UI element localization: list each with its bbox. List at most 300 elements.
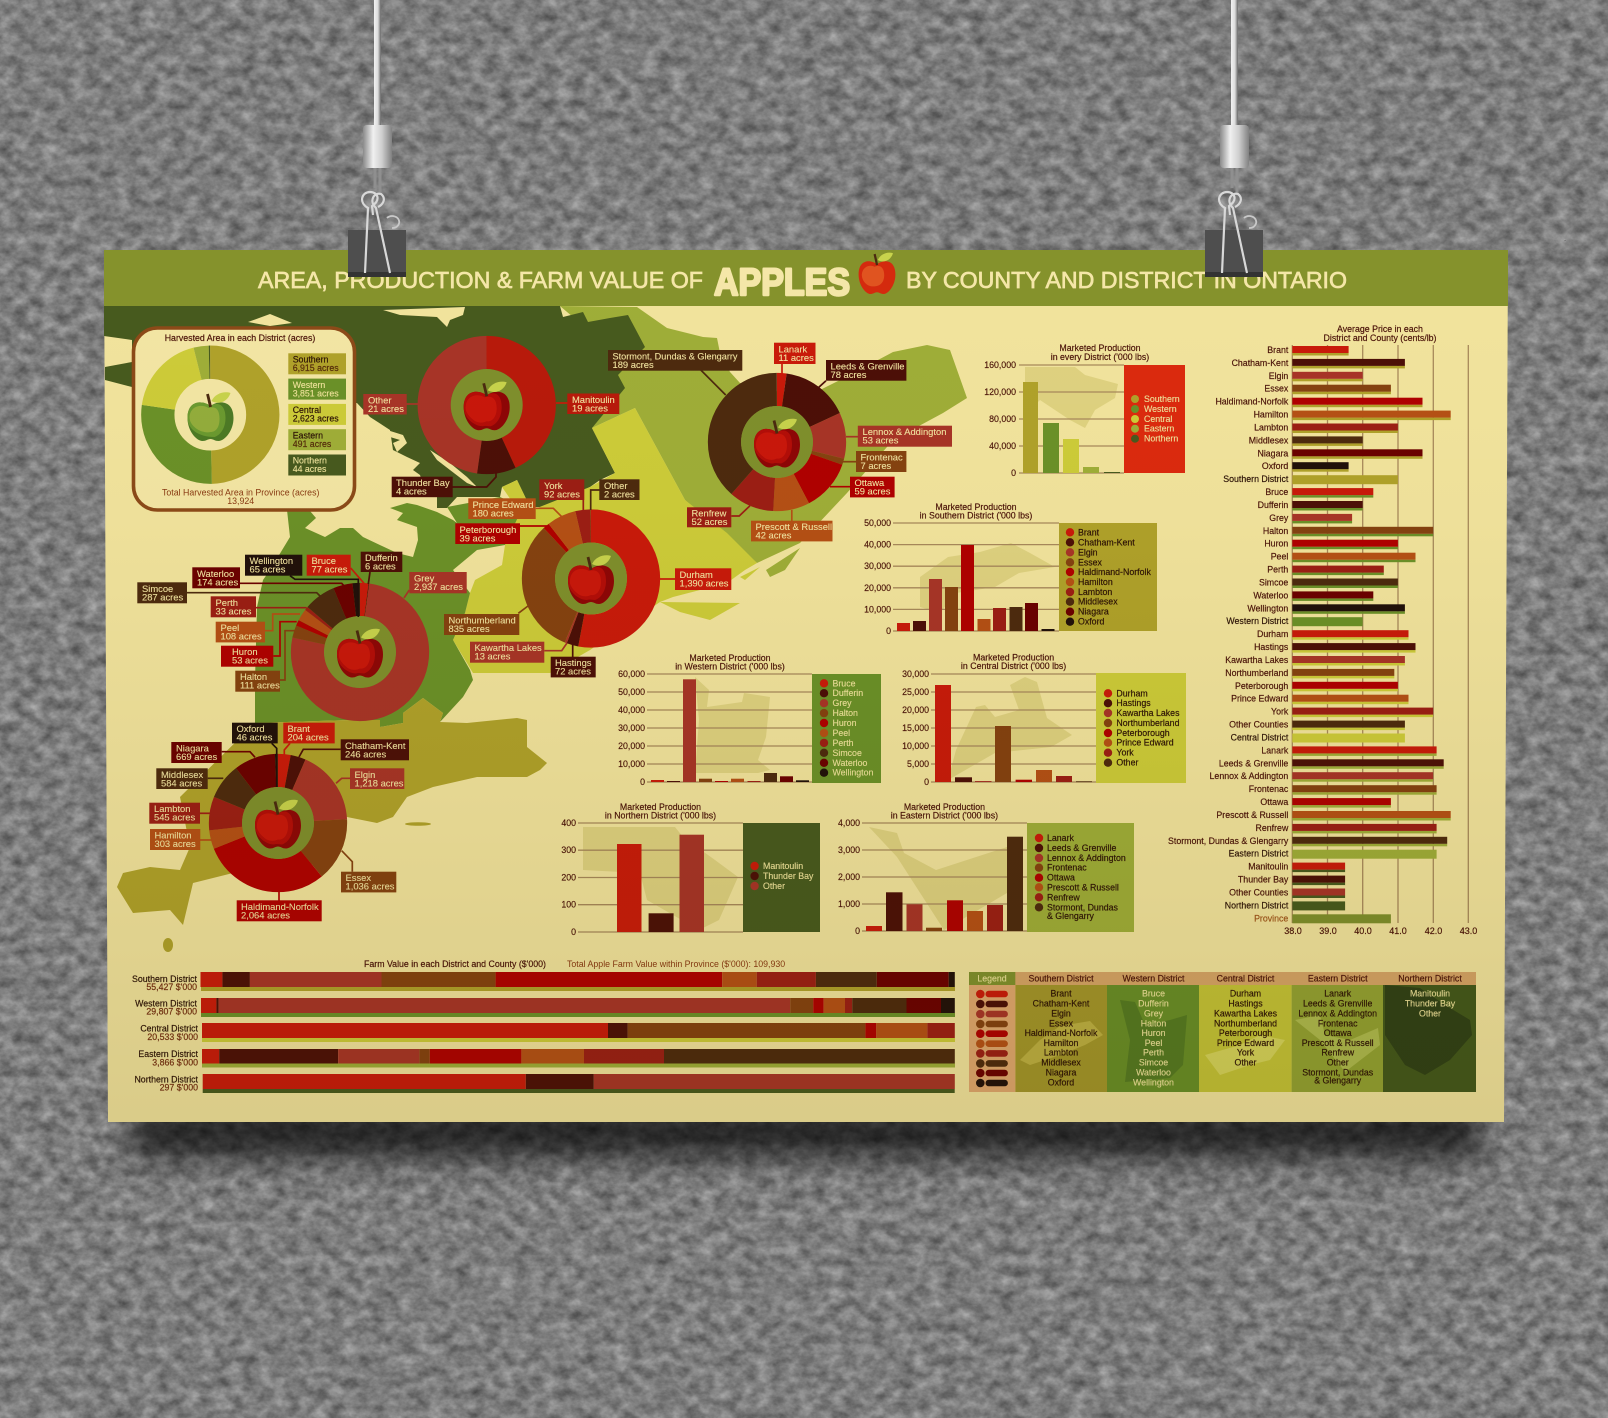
chart title: Marketed Production [904, 802, 985, 812]
legend table [969, 972, 1476, 1092]
callout: Northumberland: 835 acres [448, 623, 490, 634]
price rows: southern district: Haldimand-Norfolk [1215, 397, 1289, 407]
bar chart: western district: Dufferin [832, 688, 863, 698]
bar chart: northern district: 300 [561, 845, 576, 855]
price rows: eastern district: Leeds & Grenville [1219, 758, 1288, 768]
column: eastern district: Ottawa [1324, 1028, 1352, 1038]
bar chart: central district: Durham [1116, 688, 1148, 698]
column: southern district: Chatham-Kent [1033, 998, 1090, 1008]
row: northern district: 297 $'000 [160, 1083, 198, 1093]
bar chart: northern district: 100 [561, 900, 576, 910]
price rows: central district: Durham [1257, 629, 1288, 639]
bar chart: northern district: 200 [561, 872, 576, 882]
column: central district: Durham [1230, 988, 1261, 998]
price rows: eastern district: Frontenac [1249, 784, 1289, 794]
legend: western: 3,851 acres [293, 388, 339, 398]
bar chart: western district: 40,000 [618, 705, 645, 715]
bar chart: every district: 40,000 [989, 441, 1016, 451]
column: western district: Dufferin [1138, 998, 1169, 1008]
price rows: northern district [1225, 862, 1345, 910]
callout: Other 2 acres [591, 479, 640, 510]
callout: Grey: 2,937 acres [414, 581, 463, 592]
bar chart: southern district: Lambton [1078, 587, 1112, 597]
legend column: Legend [977, 974, 1007, 984]
price rows: eastern district: Lanark [1261, 745, 1289, 755]
column: western district: Huron [1142, 1028, 1166, 1038]
bar chart: southern district: 10,000 [864, 604, 891, 614]
column: western district: Grey [1144, 1008, 1164, 1018]
callout: Leeds & Grenville [818, 360, 906, 388]
callout: Simcoe [137, 582, 320, 603]
callout: Chatham-Kent [299, 739, 409, 760]
pie: northern district [434, 352, 539, 458]
column: southern district: Middlesex [1041, 1058, 1081, 1068]
callout: Hamilton: Hamilton [154, 830, 192, 840]
row: western district: 29,807 $'000 [146, 1007, 197, 1017]
bar chart: eastern district: Renfrew [1047, 892, 1080, 902]
callout: Durham [659, 568, 731, 590]
price rows: central district: Prince Edward [1231, 694, 1288, 704]
row: central district: 20,533 $'000 [147, 1032, 198, 1042]
map: small islands south [163, 822, 431, 952]
price rows: southern district [1215, 345, 1451, 484]
bar chart: every district: 0 [1011, 468, 1016, 478]
callout: York: York [544, 480, 563, 491]
callout: Niagara: Niagara [176, 742, 210, 754]
callout: Renfrew: 52 acres [692, 516, 728, 527]
bar chart: eastern district: & Glengarry [1047, 911, 1095, 921]
title: APPLES: APPLES [714, 262, 850, 304]
price rows: central district: Peterborough [1235, 681, 1288, 691]
legend: central [288, 404, 346, 425]
bar chart: central district: 0 [924, 777, 929, 787]
map of Ontario [104, 306, 967, 952]
bar chart: central district: Peterborough [1116, 728, 1170, 738]
bar chart: every district: Southern [1144, 394, 1180, 404]
callout: Peel [216, 614, 300, 642]
callout: Chatham-Kent: 246 acres [345, 748, 386, 759]
callout: Hastings: 72 acres [555, 666, 591, 677]
column: eastern district: Prescott & Russell [1302, 1038, 1374, 1048]
bar chart: every district: Northern [1144, 434, 1178, 444]
bar chart: central district: 20,000 [902, 705, 929, 715]
callout: Wellington [245, 555, 358, 617]
legend: northern [288, 454, 346, 476]
bar chart: central district: Kawartha Lakes [1116, 708, 1180, 718]
callout: Lambton [149, 803, 210, 824]
map: central district [453, 408, 757, 673]
farm value chart [132, 959, 955, 1093]
callout: Lennox & Addington: 53 acres [862, 435, 899, 446]
callout: Essex: 1,036 acres [346, 881, 395, 892]
callout: Bruce: 77 acres [312, 564, 348, 575]
legend: southern: 6,915 acres [293, 363, 339, 373]
bar chart: western district: Grey [832, 698, 852, 708]
bar chart: western district: 30,000 [618, 723, 645, 733]
callout: Middlesex: Middlesex [161, 769, 204, 780]
bar chart: average price: 40.0 [1354, 926, 1372, 936]
row: southern district [132, 972, 955, 992]
callout: Prescott & Russell: 42 acres [756, 530, 792, 541]
price rows: southern district: Hamilton [1254, 410, 1288, 420]
callout: Waterloo: 174 acres [197, 576, 238, 587]
panel heading: Harvested Area in each District (acres) [165, 333, 315, 343]
price rows: southern district: Brant [1267, 345, 1289, 355]
bar chart: western district: 0 [640, 777, 645, 787]
bar chart: western district: 10,000 [618, 759, 645, 769]
column: central district: Peterborough [1219, 1028, 1272, 1038]
icon: green apple [188, 392, 234, 441]
bar chart: average price: 41.0 [1389, 926, 1407, 936]
bar chart: southern district: Elgin [1078, 547, 1098, 557]
column: central district: Northumberland [1214, 1018, 1277, 1028]
bar chart: southern district: Hamilton [1078, 577, 1113, 587]
price rows: western district: Halton [1263, 526, 1288, 536]
price rows: southern district: Lambton [1254, 422, 1288, 432]
callout: Hastings: Hastings [555, 657, 592, 668]
price rows: eastern district: Renfrew [1256, 823, 1289, 833]
table header: Northern District [1398, 974, 1462, 984]
chart title: in Western District ('000 lbs) [675, 662, 785, 672]
table header: Central District [1217, 974, 1275, 984]
map: lakes and islands [248, 307, 477, 487]
bar chart: eastern district: 3,000 [838, 845, 860, 855]
callout: Frontenac: Frontenac [860, 452, 903, 462]
callout: Frontenac: 7 acres [860, 460, 892, 471]
bar chart: southern district: 0 [886, 626, 891, 636]
price rows: western district: Bruce [1265, 487, 1288, 497]
callout: Essex: Essex [346, 872, 371, 883]
column: central district: Hastings [1228, 998, 1263, 1008]
poster shading [104, 250, 1508, 1122]
bar chart: eastern district: 4,000 [838, 818, 860, 828]
price rows: central district: York [1271, 707, 1289, 717]
bar chart: average price: 43.0 [1460, 926, 1477, 936]
price rows: western district: Wellington [1247, 603, 1288, 613]
callout: Thunder Bay [392, 472, 496, 497]
column: eastern district: Other [1327, 1058, 1349, 1068]
bar chart: central district: York [1116, 748, 1134, 758]
price rows: southern district: Niagara [1257, 448, 1288, 458]
callout: Northumberland [444, 606, 528, 635]
column: southern district: Hamilton [1044, 1038, 1078, 1048]
callout: Chatham-Kent: Chatham-Kent [345, 740, 406, 751]
column: eastern district: Lennox & Addington [1298, 1008, 1377, 1018]
bar chart: central district: 15,000 [902, 723, 929, 733]
callout: Lanark: Lanark [778, 344, 807, 354]
callout: Niagara: 669 acres [176, 751, 217, 762]
bar chart: every district: 120,000 [984, 387, 1016, 397]
poster [104, 250, 1508, 1122]
bar chart: southern district: Oxford [1078, 617, 1105, 627]
price rows: central district: Kawartha Lakes [1225, 655, 1289, 665]
callout: Peel: Peel [220, 622, 239, 633]
callout: Durham: 1,390 acres [680, 578, 729, 588]
callout: Haldimand-Norfolk: Haldimand-Norfolk [241, 901, 319, 912]
bar chart: average price: 42.0 [1425, 926, 1442, 936]
callout: Dufferin [361, 552, 402, 584]
price rows: western district [1226, 487, 1433, 626]
callout: Wellington: Wellington [250, 555, 293, 566]
price rows: southern district: Southern District [1223, 474, 1289, 484]
row: eastern district: 3,866 $'000 [152, 1057, 198, 1067]
callout: Peterborough: 39 acres [460, 532, 496, 543]
row: eastern district [138, 1049, 955, 1068]
legend: southern [288, 353, 346, 374]
bar chart: average price [1168, 324, 1477, 936]
price rows: central district: Northumberland [1225, 668, 1288, 678]
callout: Prince Edward: 180 acres [472, 507, 514, 518]
callout: Prescott & Russell [751, 510, 832, 541]
price rows: southern district: Middlesex [1249, 435, 1289, 445]
bar chart: southern district: Chatham-Kent [1078, 537, 1135, 547]
callout: Manitoulin: 19 acres [572, 402, 608, 414]
row: western district: Western District [135, 998, 198, 1008]
row: northern district: Northern District [134, 1074, 199, 1084]
column: southern district: Haldimand-Norfolk [1025, 1028, 1098, 1038]
callout: Lambton: Lambton [154, 803, 190, 814]
price rows: eastern district: Lennox & Addington [1210, 771, 1288, 781]
callout: Waterloo [192, 567, 345, 588]
bar chart: eastern district: Lanark [1047, 833, 1074, 843]
bar chart: eastern district: Prescott & Russell [1047, 882, 1119, 892]
bar chart: southern district: 20,000 [864, 583, 891, 593]
legend: eastern: Eastern [293, 430, 323, 440]
bar chart: northern district: Thunder Bay [763, 871, 814, 881]
bar chart: southern district [864, 502, 1157, 636]
column: southern district: Lambton [1044, 1048, 1078, 1058]
bar chart: western district: Bruce [832, 678, 856, 688]
chart title: District and County (cents/lb) [1324, 333, 1437, 343]
column: western district: Perth [1143, 1048, 1164, 1058]
column: western district: Simcoe [1139, 1058, 1168, 1068]
title: right part: BY COUNTY AND DISTRICT IN ONTARIO [906, 267, 1347, 293]
panel: harvested area by district [134, 328, 354, 510]
price rows: western district: Waterloo [1253, 590, 1288, 600]
callout: Prescott & Russell: Prescott & Russell [756, 521, 832, 532]
pie: western district [308, 600, 412, 704]
column: southern district [1015, 985, 1107, 1092]
title band [104, 250, 1508, 306]
callout: Peterborough [455, 523, 566, 548]
callout: Peel: 108 acres [220, 630, 262, 642]
bar chart: central district: Other [1116, 758, 1138, 768]
column: western district: Halton [1141, 1018, 1166, 1028]
price rows: western district: Western District [1226, 616, 1289, 626]
column: central district: Kawartha Lakes [1214, 1008, 1278, 1018]
callout: Other 2 acres: Other [604, 480, 627, 491]
bar chart: western district: Peel [832, 728, 850, 738]
callout: Perth: 33 acres [216, 605, 252, 616]
callout: Leeds & Grenville: 78 acres [830, 369, 867, 380]
callout: Thunder Bay: Thunder Bay [396, 477, 450, 488]
bar chart: southern district: 30,000 [864, 561, 891, 571]
callout: Lambton: 545 acres [154, 812, 195, 823]
bar chart: western district: Waterloo [832, 758, 867, 768]
price row: province: Province [1254, 913, 1288, 923]
callout: Essex [341, 851, 396, 892]
price rows: northern district: Northern District [1225, 900, 1289, 910]
callout: Halton: Halton [240, 671, 267, 682]
row: northern district [134, 1074, 955, 1093]
price rows: southern district: Chatham-Kent [1232, 358, 1289, 368]
bar chart: northern district: Manitoulin [763, 861, 803, 871]
price rows: southern district: Essex [1264, 384, 1289, 394]
bar chart: every district: Western [1144, 404, 1177, 414]
callout: Hamilton [150, 829, 212, 850]
farm value heading: Farm Value in each District and County ($'000) [364, 959, 546, 969]
row: central district [140, 1023, 955, 1042]
total harvested area [162, 488, 319, 506]
donut: district shares [158, 362, 263, 467]
bar chart: eastern district: 1,000 [838, 899, 860, 909]
row: southern district: 55,427 $'000 [146, 982, 197, 992]
bar chart: eastern district: Ottawa [1047, 873, 1075, 883]
price rows: eastern district: Stormont, Dundas & Glengarry [1168, 836, 1289, 846]
callout: Dufferin: Dufferin [365, 552, 398, 563]
bar chart: eastern district: Stormont, Dundas [1047, 902, 1119, 912]
pie: southern district [226, 770, 330, 876]
price rows: eastern district: Prescott & Russell [1216, 810, 1288, 820]
callout: Lanark: 11 acres [778, 352, 814, 363]
pie: eastern district [724, 390, 830, 494]
callout: Huron: 53 acres [232, 655, 268, 666]
legend: eastern: 491 acres [293, 439, 332, 449]
map: northern wedge west of panel [105, 362, 132, 387]
legend: central: 2,623 acres [293, 414, 339, 424]
total farm value: Total Apple Farm Value within Province ($'000): 109,930 [567, 959, 785, 969]
table header: Eastern District [1308, 974, 1368, 984]
bar chart: central district [902, 652, 1186, 787]
callout: Elgin: 1,218 acres [354, 777, 404, 788]
column: northern district: Manitoulin [1410, 988, 1450, 998]
column: eastern district: Frontenac [1318, 1018, 1358, 1028]
map: central strip [502, 480, 530, 507]
callout: Leeds & Grenville: Leeds & Grenville [830, 360, 904, 372]
bar chart: southern district: Niagara [1078, 607, 1109, 617]
column: southern district: Brant [1050, 988, 1072, 998]
bar chart: western district: 50,000 [618, 687, 645, 697]
bar chart: southern district: 50,000 [864, 518, 891, 528]
callout: Bruce: Bruce [312, 555, 336, 566]
price rows: northern district: Other Counties [1229, 888, 1289, 898]
price rows: eastern district: Eastern District [1229, 849, 1289, 859]
bar chart: western district: Wellington [832, 768, 874, 778]
chart title: Average Price in each [1337, 324, 1423, 334]
bar chart: eastern district: Leeds & Grenville [1047, 843, 1117, 853]
bar chart: southern district: Middlesex [1078, 597, 1118, 607]
icon: title apple [859, 253, 895, 294]
bar chart: every district: 80,000 [989, 414, 1016, 424]
callout: Manitoulin [556, 394, 619, 414]
callout: Stormont, Dundas & Glengarry: Stormont, Dundas & Glengarry [612, 350, 738, 362]
price rows: central district: Other Counties [1229, 720, 1289, 730]
legend: northern: 44 acres [293, 464, 327, 474]
bar chart: central district: Hastings [1116, 698, 1151, 708]
callout: Middlesex [156, 768, 223, 789]
chart title: Marketed Production [689, 653, 771, 663]
callout: Huron [221, 622, 297, 667]
callout: Grey: Grey [414, 572, 435, 584]
bar chart: western district: 60,000 [618, 669, 645, 679]
legend: eastern [288, 429, 346, 450]
price rows: southern district: Elgin [1269, 371, 1288, 381]
bar chart: western district: Halton [832, 708, 858, 718]
price row: province [1254, 913, 1391, 923]
column: central district [1199, 985, 1292, 1092]
bar chart: central district: 5,000 [907, 759, 929, 769]
callout: Grey [404, 572, 467, 598]
callout: Simcoe: 287 acres [142, 591, 183, 602]
column: eastern district: Stormont, Dundas [1302, 1068, 1374, 1078]
callout: Halton [235, 631, 295, 692]
column: western district: Wellington [1133, 1077, 1174, 1087]
bar chart: average price: 39.0 [1319, 926, 1337, 936]
row: western district [135, 998, 955, 1017]
map: central islands [660, 567, 760, 620]
column: western district: Peel [1145, 1038, 1162, 1048]
chart title: in every District ('000 lbs) [1051, 352, 1149, 362]
bar chart: every district: 160,000 [984, 360, 1016, 370]
title: left part: AREA, PRODUCTION & FARM VALUE OF [258, 267, 703, 293]
bar chart: average price: 38.0 [1284, 926, 1302, 936]
callout: Lennox & Addington [846, 426, 952, 447]
map: northern district [104, 306, 645, 508]
callout: Peterborough: Peterborough [460, 524, 516, 535]
map: southern district [117, 698, 547, 925]
chart title: in Central District ('000 lbs) [961, 661, 1066, 671]
row: southern district: Southern District [132, 974, 198, 984]
callout: Manitoulin: Manitoulin [572, 394, 615, 405]
total harvested area: Total Harvested Area in Province (acres) [162, 488, 319, 498]
callout: Kawartha Lakes [470, 642, 567, 663]
column: western district: Waterloo [1136, 1067, 1171, 1077]
price rows: eastern district: Ottawa [1260, 797, 1288, 807]
bar chart: eastern district: 0 [855, 926, 860, 936]
map: eastern island [766, 548, 800, 577]
bar chart: eastern district: Lennox & Addington [1047, 853, 1126, 863]
callout: Halton: 111 acres [240, 680, 280, 691]
callout: Brant: 204 acres [288, 732, 329, 743]
column: eastern district [1292, 985, 1383, 1092]
bar chart: northern district: Other [763, 881, 785, 891]
callout: Lennox & Addington: Lennox & Addington [862, 426, 946, 437]
price rows: northern district: Manitoulin [1248, 862, 1288, 872]
bar chart: northern district: 0 [571, 927, 576, 937]
legend: northern: Northern [293, 456, 327, 466]
chart title: Marketed Production [935, 502, 1017, 512]
callout: Bruce [307, 555, 364, 583]
chart title: Marketed Production [973, 652, 1054, 662]
callout: Huron: Huron [232, 646, 258, 657]
callout: Oxford: 46 acres [236, 732, 273, 743]
column: northern district: Thunder Bay [1405, 998, 1456, 1008]
callout: Other 21 acres: Other [368, 394, 391, 406]
callout: Wellington: 65 acres [250, 564, 286, 575]
callout: Middlesex: 584 acres [161, 777, 202, 788]
price rows: western district: Peel [1271, 552, 1288, 562]
price rows: central district: Central District [1231, 732, 1289, 742]
bar chart: northern district [561, 802, 820, 937]
legend: central: Central [293, 405, 321, 415]
callout: Hastings [551, 643, 596, 677]
price rows: central district [1225, 629, 1433, 742]
bar chart: southern district: Essex [1078, 557, 1103, 567]
bar chart: southern district: 40,000 [864, 540, 891, 550]
price rows: western district: Dufferin [1258, 500, 1288, 510]
chart title: Marketed Production [1059, 343, 1141, 353]
bar chart: every district: Eastern [1144, 424, 1174, 434]
